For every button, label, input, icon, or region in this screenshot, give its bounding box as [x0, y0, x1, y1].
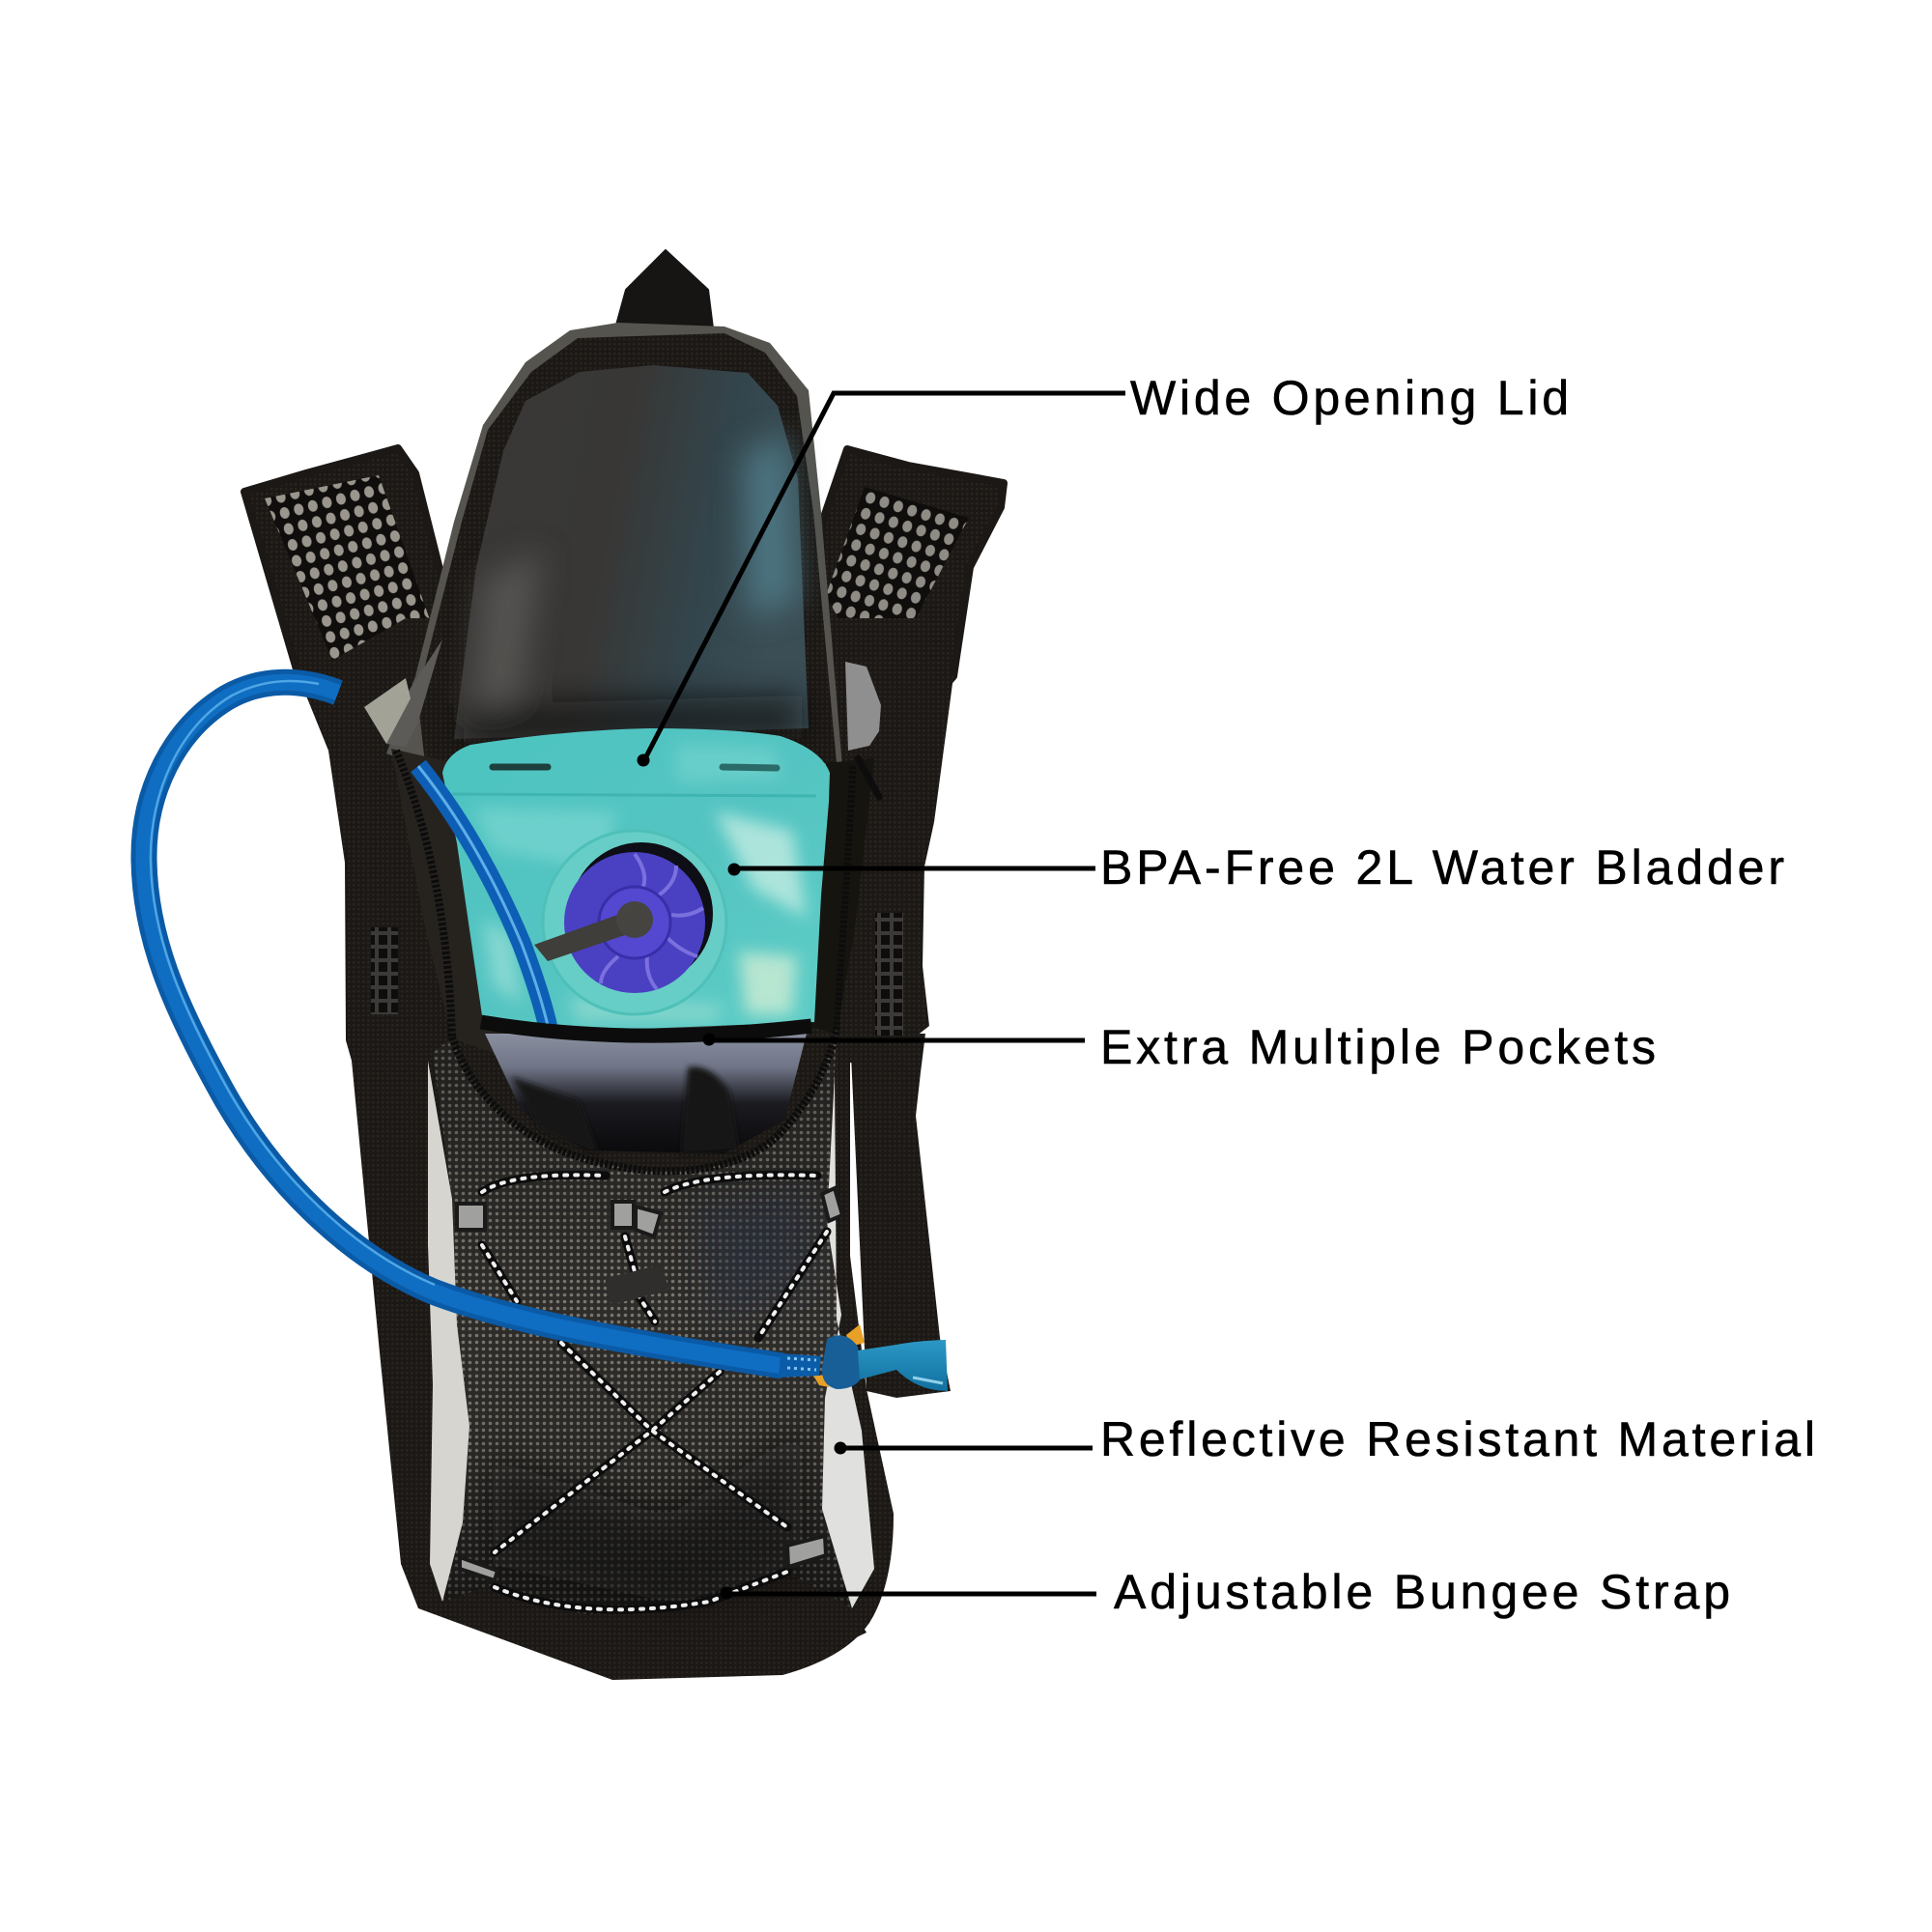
lining highlights — [464, 435, 802, 744]
left side mesh panel — [391, 749, 522, 1063]
leader line — [728, 864, 1095, 875]
label: BPA-Free 2L Water Bladder — [1100, 840, 1784, 895]
callout: wide opening lid — [638, 371, 1569, 767]
water bladder — [442, 728, 830, 1032]
right hanging strap — [850, 1034, 951, 1398]
adjustable bungee cord — [482, 1175, 827, 1609]
main body — [299, 618, 953, 1680]
right strap mesh — [826, 487, 969, 692]
tether strap — [534, 914, 631, 961]
label: Extra Multiple Pockets — [1100, 1020, 1656, 1074]
beaded connector — [779, 1353, 821, 1378]
pocket opening band — [481, 1022, 811, 1036]
illustration: hydration backpack — [144, 250, 1004, 1680]
label: Wide Opening Lid — [1130, 371, 1569, 425]
orange valve wings — [813, 1324, 865, 1387]
bladder reflections — [473, 744, 807, 1022]
panel shadows — [493, 1188, 811, 1604]
lower strap mesh right — [875, 913, 903, 1036]
callout: water bladder — [728, 840, 1784, 895]
zip pull — [858, 758, 879, 797]
lid lining — [454, 365, 809, 739]
leader line — [835, 1441, 1093, 1455]
main zipper arc — [452, 1028, 837, 1171]
callout: reflective material — [835, 1412, 1815, 1466]
leader line — [703, 1034, 1085, 1045]
left hanging slot — [493, 763, 548, 771]
reflective cord tabs — [457, 1188, 842, 1580]
valve body — [822, 1335, 862, 1389]
right shoulder strap — [820, 449, 1004, 773]
drink tube — [144, 681, 782, 1366]
label: Reflective Resistant Material — [1100, 1412, 1815, 1466]
left gray side patch — [364, 639, 442, 747]
leader line — [721, 1586, 1096, 1600]
left shoulder strap — [244, 448, 454, 734]
bite valve — [779, 1324, 948, 1391]
right zipper run — [837, 766, 853, 1028]
callout: bungee strap — [721, 1565, 1730, 1619]
right gray side patch — [845, 662, 881, 797]
leader line — [638, 393, 1125, 767]
extra pocket — [481, 1022, 811, 1154]
right side mesh panel — [807, 758, 874, 1034]
screw cap — [534, 842, 713, 993]
lower strap mesh left — [371, 927, 398, 1014]
reflective panel left — [428, 1061, 469, 1602]
fill port collar — [543, 831, 726, 1014]
right hanging slot — [723, 767, 777, 768]
inner drink tube — [418, 766, 549, 1030]
wide opening lid — [386, 323, 842, 768]
pocket contents — [512, 1066, 739, 1154]
left strap mesh — [265, 475, 433, 688]
bottom fabric — [421, 1572, 867, 1678]
reflective panel right — [822, 1074, 874, 1608]
top carry handle — [615, 250, 713, 328]
callout: pockets — [703, 1020, 1656, 1074]
bladder top seal — [452, 794, 816, 796]
label: Adjustable Bungee Strap — [1114, 1565, 1730, 1619]
cord lock toggle — [605, 1264, 668, 1305]
front mesh panel — [421, 1028, 867, 1678]
left zipper run — [396, 751, 452, 1037]
silicone mouthpiece — [858, 1340, 948, 1391]
